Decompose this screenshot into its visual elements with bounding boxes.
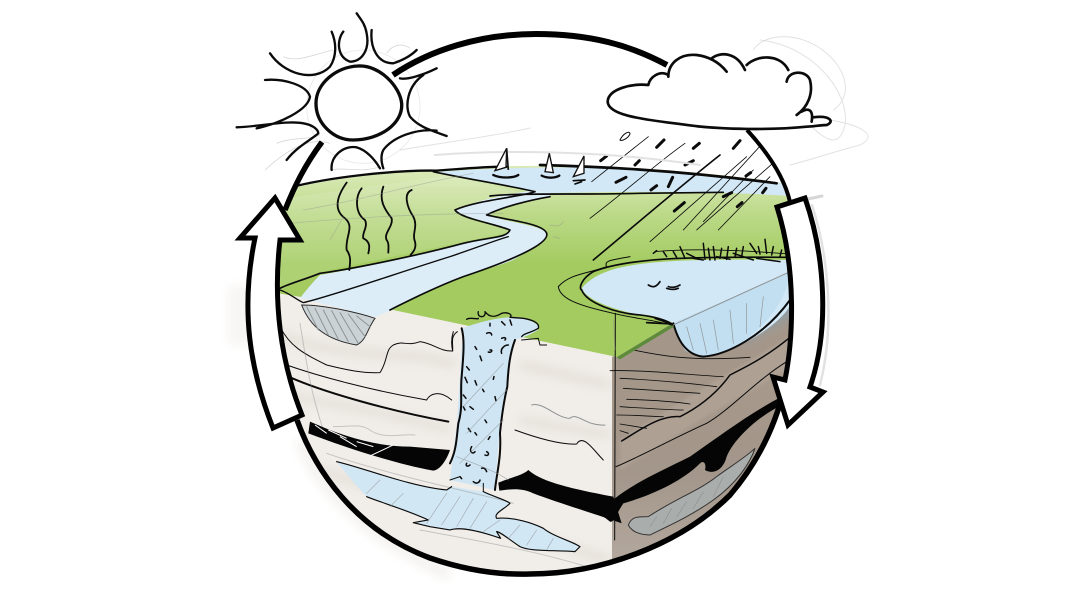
waterfall water	[450, 317, 538, 490]
pond cross section outline	[673, 300, 790, 357]
arrow: right downward	[773, 198, 823, 425]
pond cut green fringe	[647, 318, 672, 324]
pond outline	[580, 257, 788, 325]
strata and water details, left face	[280, 305, 622, 567]
faint sketch lines	[300, 323, 587, 567]
circle ring segment: top arc	[393, 34, 667, 75]
ink lines on surface left, river and heat	[280, 167, 550, 310]
sun	[237, 13, 447, 170]
lake shore	[490, 192, 723, 196]
reeds	[653, 239, 782, 262]
outlined drops	[620, 132, 793, 164]
near river bank	[280, 237, 508, 303]
water cycle illustration	[232, 12, 868, 577]
white scratches on coal	[315, 425, 393, 456]
green land surface	[270, 166, 805, 357]
groundwater pool	[337, 462, 580, 552]
back edge shoreline	[540, 165, 777, 183]
pond hatching	[687, 297, 763, 353]
block diagram of land	[270, 132, 810, 580]
arrow: left upward	[240, 198, 302, 428]
right cut face	[612, 308, 790, 559]
sailboats	[493, 148, 585, 184]
lower river bank	[390, 197, 550, 310]
lower groundwater	[628, 448, 755, 535]
river bed hatching	[307, 307, 370, 343]
faint sketch shadows outside circle	[400, 40, 868, 385]
back lake	[437, 167, 800, 196]
pond darker cross section	[673, 272, 790, 356]
right face details	[590, 297, 790, 540]
waterfall top outline	[467, 312, 539, 337]
boat 1	[493, 148, 518, 177]
back edge of land	[287, 167, 507, 188]
sketch land lines	[550, 222, 615, 350]
cloud body	[608, 54, 829, 129]
sun sketch halo	[265, 45, 420, 170]
horizontal strata lines	[610, 350, 750, 433]
cloud outline	[608, 54, 831, 129]
groundwater hatching	[367, 480, 553, 550]
green front edge of land	[617, 324, 674, 359]
lower groundwater hatch	[650, 477, 723, 527]
circle ring segment: sun to arrow	[285, 142, 322, 210]
boat 2	[542, 153, 559, 178]
circle ring segment: bottom arc	[297, 377, 787, 574]
waterfall droplets	[460, 320, 512, 483]
faint sketch on land	[290, 173, 503, 240]
soft background wash at left	[228, 285, 258, 345]
waterfall sketch lines	[457, 363, 508, 480]
sun rays	[237, 13, 447, 170]
pond outer shore	[558, 257, 672, 325]
long rain streak	[593, 155, 720, 260]
upper river bank	[280, 172, 535, 288]
black coal layer left	[308, 422, 450, 471]
black coal layer right	[498, 470, 622, 523]
groundwater outline	[337, 462, 580, 552]
circle ring segment: cloud to arrow	[747, 130, 790, 202]
rain streaks	[590, 132, 777, 242]
thick strata lines	[622, 337, 790, 441]
ducks	[648, 282, 680, 290]
pond surface edge	[673, 272, 790, 325]
sun disc	[316, 66, 402, 140]
boat 3	[573, 156, 585, 184]
lighter green wash left	[275, 175, 530, 290]
soft wash outside lower left of circle	[300, 440, 450, 575]
pond	[582, 260, 793, 356]
waterfall edges	[450, 328, 464, 463]
surface details right: lake shore, pond ink, reeds	[490, 132, 804, 350]
rain drops	[601, 136, 804, 211]
hatched river bed	[302, 305, 375, 345]
cloud	[608, 37, 845, 129]
river	[300, 190, 550, 317]
black coal seam	[604, 399, 778, 522]
cloud sketch	[630, 37, 845, 110]
strata lines	[280, 327, 457, 373]
corner vertical	[614, 312, 616, 540]
left cut face	[270, 285, 617, 580]
heat wave lines	[338, 183, 415, 270]
